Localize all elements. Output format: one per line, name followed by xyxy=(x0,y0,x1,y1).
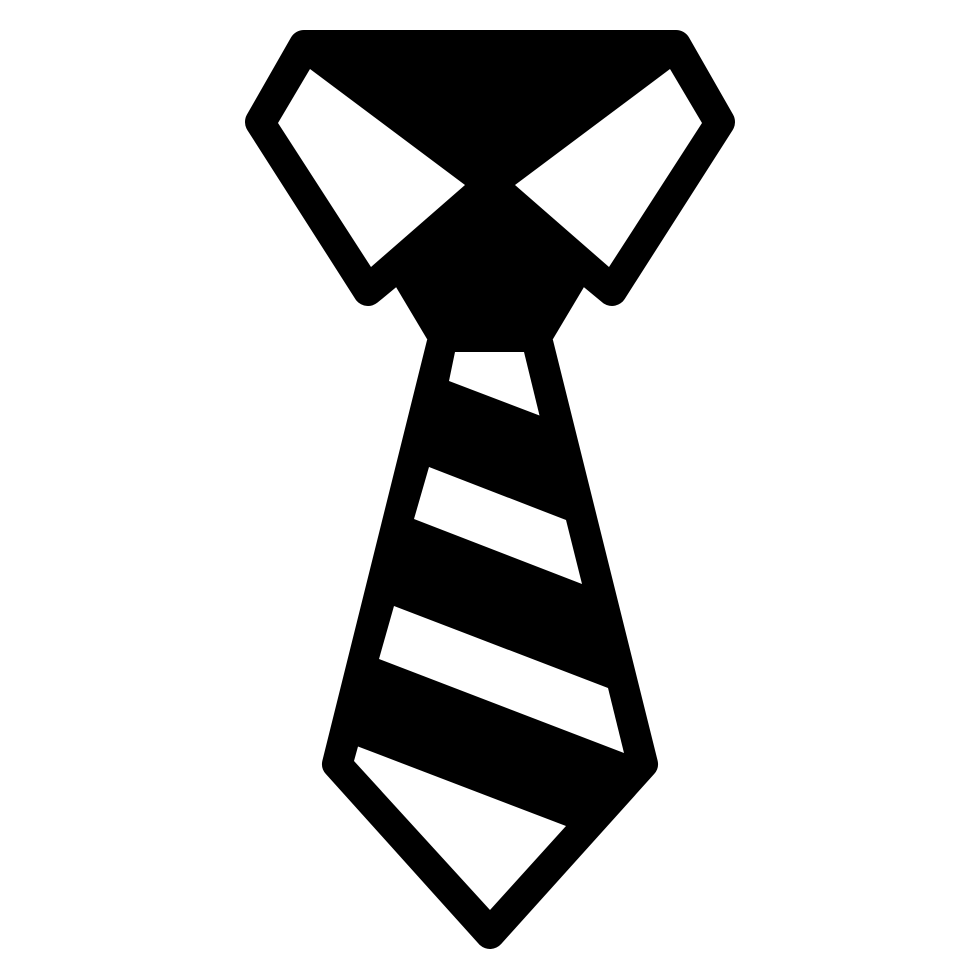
knot silhouette xyxy=(396,170,584,339)
tie tip xyxy=(354,746,566,910)
left collar wing xyxy=(278,69,465,267)
tie stripe 1 xyxy=(449,352,540,416)
icon: necktie with collar xyxy=(260,45,720,934)
tie stripe 3 xyxy=(379,606,624,753)
tie stripe 2 xyxy=(414,467,582,584)
tie blade silhouette xyxy=(337,342,643,934)
right collar wing xyxy=(515,69,702,267)
collar silhouette xyxy=(260,45,720,291)
